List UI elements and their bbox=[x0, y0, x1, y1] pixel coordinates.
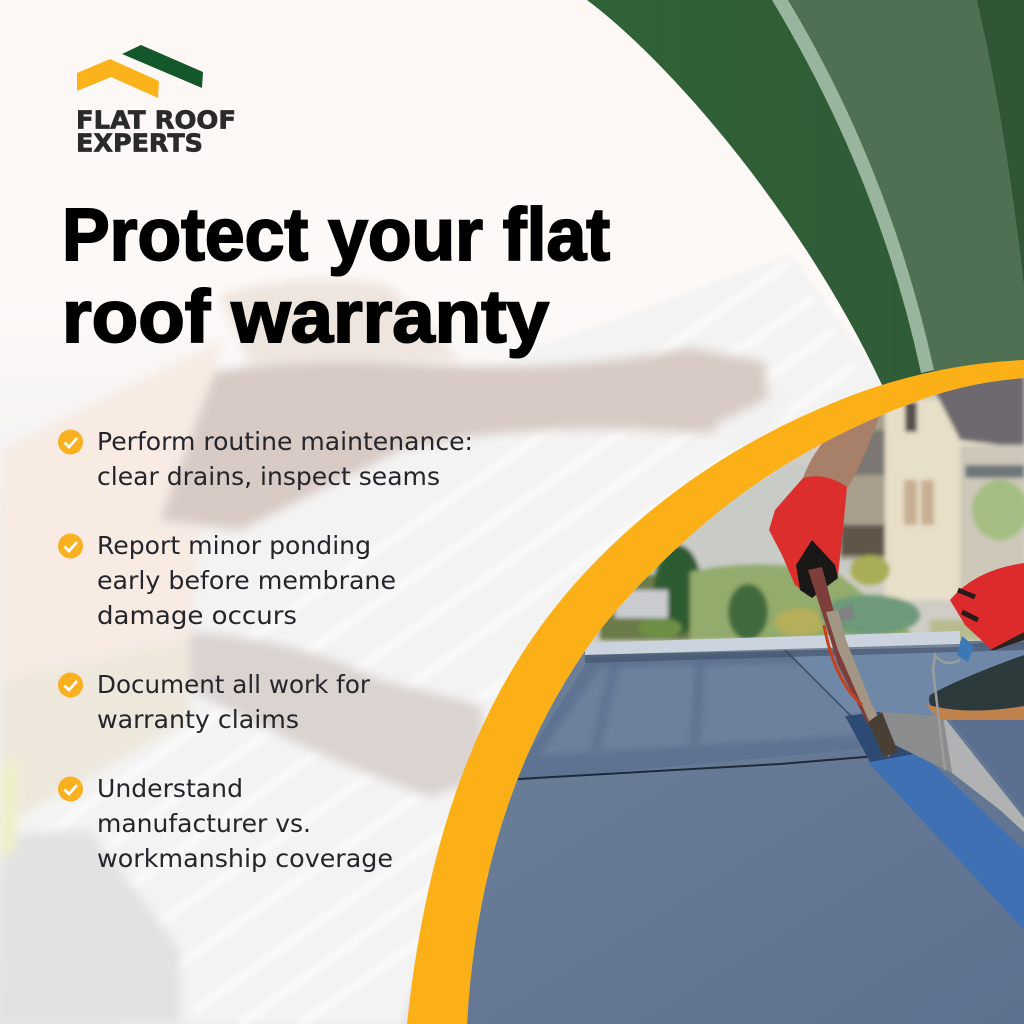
right dark band bbox=[977, 0, 1024, 285]
item: document work bbox=[58, 670, 371, 734]
blue wet zone bbox=[868, 752, 1024, 930]
pale stripe bbox=[772, 0, 934, 373]
seam line bbox=[518, 756, 868, 780]
title bbox=[62, 193, 610, 358]
yellow arc band bbox=[407, 360, 1024, 1024]
logo wordmark: EXPERTS bbox=[76, 128, 203, 158]
green arc panel bbox=[587, 0, 1024, 385]
item: coverage: Understand bbox=[97, 774, 243, 803]
shoe bbox=[929, 655, 1024, 712]
torch bbox=[808, 567, 870, 725]
item: routine maintenance bbox=[58, 427, 473, 491]
parapet edge bbox=[585, 631, 960, 655]
photo: roof worker bbox=[467, 378, 1024, 1024]
title: Protect your flat bbox=[62, 193, 610, 276]
item: routine maintenance: Perform routine maintenance: bbox=[97, 427, 473, 456]
light green arc band bbox=[772, 0, 1024, 372]
logo bbox=[76, 45, 236, 158]
item: coverage: manufacturer vs. bbox=[97, 809, 311, 838]
item: coverage bbox=[58, 774, 393, 873]
item: coverage: workmanship coverage bbox=[97, 844, 393, 873]
item: document work: warranty claims bbox=[97, 705, 299, 734]
arm bbox=[803, 415, 880, 488]
item: routine maintenance: clear drains, inspect seams bbox=[97, 462, 440, 491]
logo mark bbox=[77, 45, 203, 98]
item: document work: Document all work for bbox=[97, 670, 371, 699]
cream house bbox=[881, 398, 992, 603]
item: report ponding bbox=[58, 531, 396, 630]
trees and hedges bbox=[600, 575, 700, 640]
logo wordmark bbox=[76, 106, 236, 158]
far hand glove bbox=[950, 563, 1024, 650]
item: report ponding: early before membrane bbox=[97, 566, 396, 595]
distant building bbox=[676, 504, 855, 572]
item: report ponding: damage occurs bbox=[97, 601, 297, 630]
roof surface right of flap bbox=[950, 720, 1024, 791]
item: report ponding: Report minor ponding bbox=[97, 531, 371, 560]
roof membrane bbox=[467, 640, 1024, 1024]
title: roof warranty bbox=[62, 275, 549, 358]
silver flap bbox=[880, 712, 952, 773]
checklist bbox=[58, 427, 473, 873]
near hand glove bbox=[769, 476, 847, 598]
logo wordmark: FLAT ROOF bbox=[76, 106, 236, 134]
